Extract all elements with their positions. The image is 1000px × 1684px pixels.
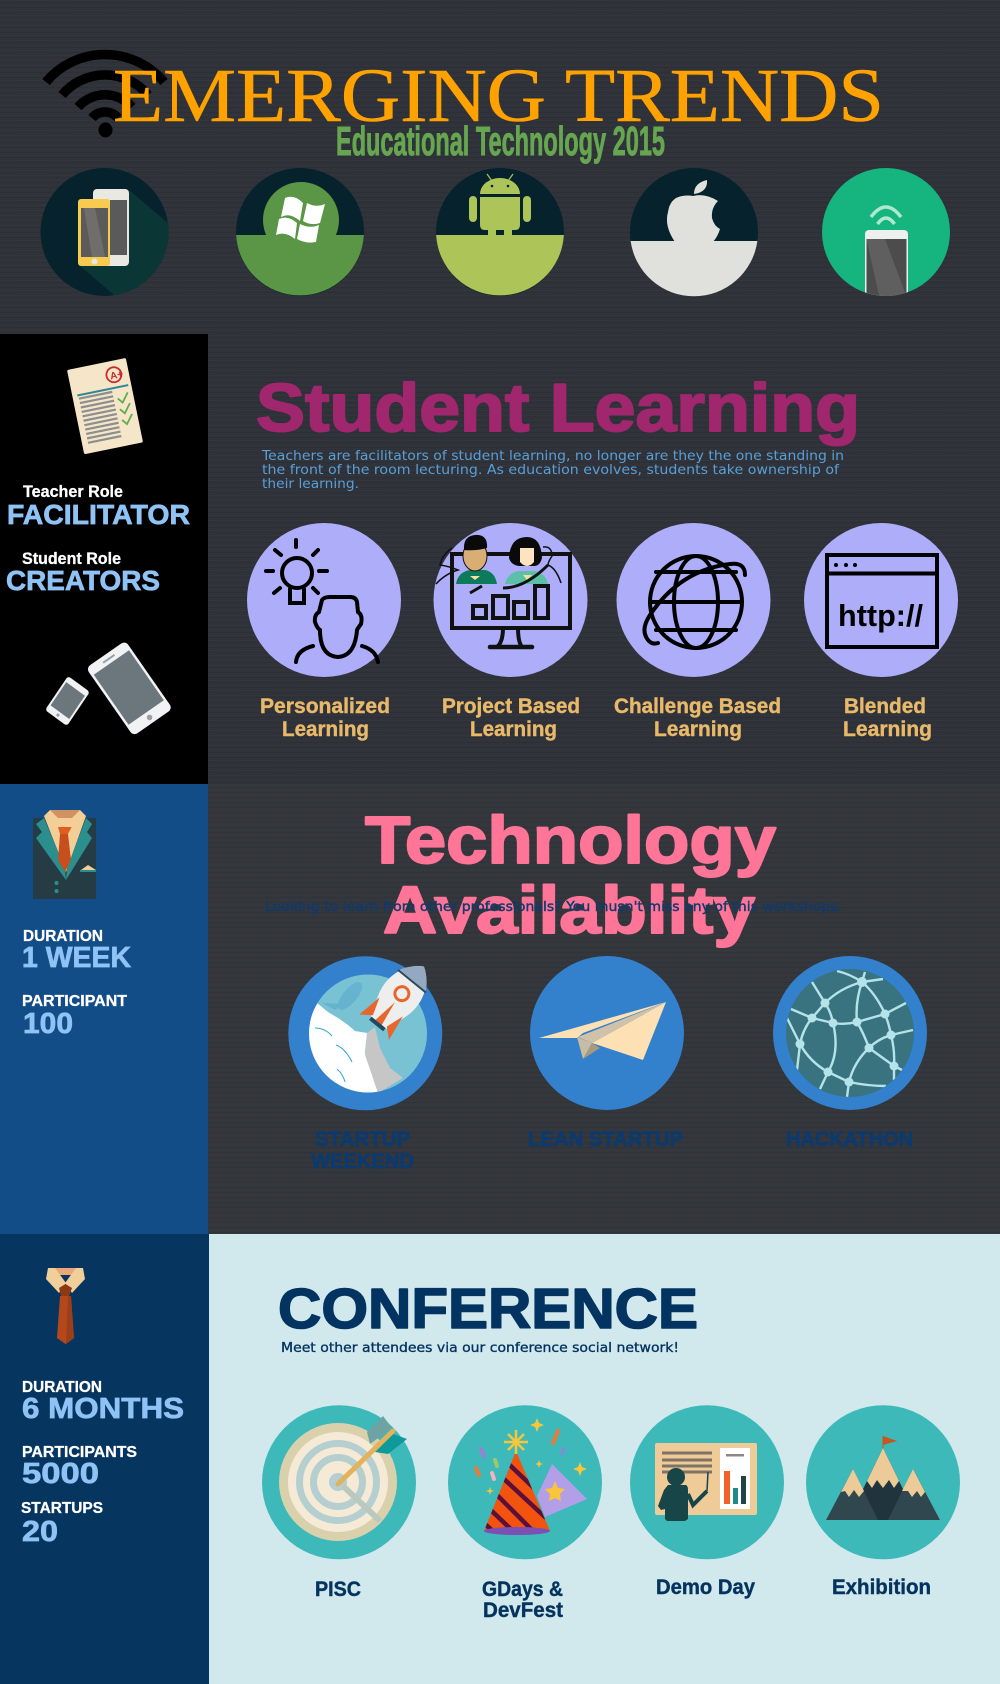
label: demo day: Demo Day — [656, 1576, 755, 1599]
label: startup weekend — [311, 1128, 414, 1173]
text block: student learning description: their learning. — [262, 476, 359, 492]
panel: technology availability — [265, 803, 927, 1173]
icon: party hat — [448, 1405, 602, 1559]
icon: mountains with flag — [806, 1405, 960, 1559]
icon: network globe — [773, 956, 927, 1110]
text: startups value: 20 — [22, 1516, 58, 1548]
label: startup weekend: WEEKEND — [311, 1150, 414, 1173]
label: blended learning: Learning — [843, 718, 932, 741]
heading: technology availablity — [365, 803, 776, 948]
text: conference description: Meet other attendees via our conference social network! — [281, 1340, 679, 1356]
text: teacher role: Teacher Role — [23, 483, 123, 501]
icon: phones — [45, 641, 173, 736]
label: challenge based learning — [614, 695, 781, 741]
icon: android circle — [436, 168, 564, 296]
panel: header — [40, 54, 950, 300]
label: gdays and devfest — [482, 1578, 563, 1622]
label: project based learning — [442, 695, 580, 741]
heading: student learning: Student Learning — [256, 370, 860, 446]
text: student role: Student Role — [22, 550, 121, 568]
icon: wireless phone circle — [822, 168, 950, 300]
label: startup weekend: STARTUP — [315, 1128, 410, 1151]
icon: blended learning — [804, 523, 958, 677]
icon: paper plane — [530, 956, 684, 1110]
label: challenge based learning: Learning — [654, 718, 742, 741]
label: personalized learning: Personalized — [260, 695, 390, 718]
icon: wifi signal — [46, 54, 164, 138]
label: blended learning: Blended — [844, 695, 926, 718]
panel: six months sidebar — [0, 1234, 209, 1684]
icon: smartphones circle — [40, 168, 175, 300]
label: personalized learning: Learning — [282, 718, 369, 741]
text block: student learning description: Teachers are facilitators of student learning, no longer are they the one standing in — [261, 448, 844, 464]
label: project based learning: Learning — [470, 718, 557, 741]
icon: target — [262, 1405, 416, 1559]
text: participant label: PARTICIPANT — [22, 993, 127, 1010]
text: workshops description: Looking to learn from other professionals? You musn't miss any of this workshops. — [265, 899, 842, 915]
label: project based learning: Project Based — [442, 695, 580, 718]
heading: technology availablity: Technology — [365, 803, 776, 878]
label: challenge based learning: Challenge Based — [614, 695, 781, 718]
label: exhibition: Exhibition — [832, 1576, 931, 1599]
panel: header background — [0, 0, 1000, 1234]
text: duration label: DURATION — [23, 928, 103, 945]
label: personalized learning — [260, 695, 390, 741]
icon: graded paper: A+ — [109, 369, 124, 382]
heading: conference: CONFERENCE — [278, 1277, 698, 1341]
label: gdays and devfest: DevFest — [483, 1599, 563, 1622]
text: participant value: 100 — [23, 1008, 73, 1040]
label: blended learning — [843, 695, 932, 741]
label: lean startup: LEAN STARTUP — [528, 1128, 683, 1151]
icon: challenge based learning — [616, 523, 770, 677]
panel: one week sidebar — [0, 784, 208, 1234]
text: duration value: 6 MONTHS — [22, 1393, 184, 1425]
title: EMERGING TRENDS — [113, 54, 884, 138]
subtitle: Educational Technology 2015 — [336, 118, 665, 164]
text: facilitator: FACILITATOR — [7, 499, 190, 530]
text: duration label: DURATION — [22, 1379, 102, 1396]
text: participants value: 5000 — [22, 1458, 99, 1490]
text block: student learning description — [261, 448, 844, 492]
icon: necktie — [46, 1268, 85, 1344]
icon: apple circle — [630, 168, 758, 296]
icon: suit — [33, 810, 96, 899]
text: startups label: STARTUPS — [21, 1500, 103, 1517]
label: gdays and devfest: GDays & — [482, 1578, 563, 1601]
text: duration value: 1 WEEK — [22, 942, 131, 974]
icon: rocket — [288, 954, 442, 1110]
text: participants label: PARTICIPANTS — [22, 1444, 137, 1461]
icon: blended learning: http:// — [838, 598, 923, 633]
panel: teacher and student roles sidebar — [0, 334, 208, 784]
icon: windows circle — [236, 168, 364, 296]
icon: demo presentation — [630, 1405, 784, 1559]
icon: project based learning — [434, 523, 588, 677]
text block: student learning description: the front of the room lecturing. As education evolves, students take ownership of — [262, 462, 840, 478]
icon: personalized learning — [247, 523, 401, 677]
icon: graded paper — [67, 358, 143, 454]
panel: student learning — [247, 370, 958, 741]
label: hackathon: HACKATHON — [786, 1128, 913, 1151]
panel: conference — [209, 1234, 1000, 1684]
label: pisc: PISC — [315, 1578, 361, 1601]
heading: technology availablity: Availablity — [383, 873, 755, 948]
text: creators: CREATORS — [6, 565, 160, 596]
